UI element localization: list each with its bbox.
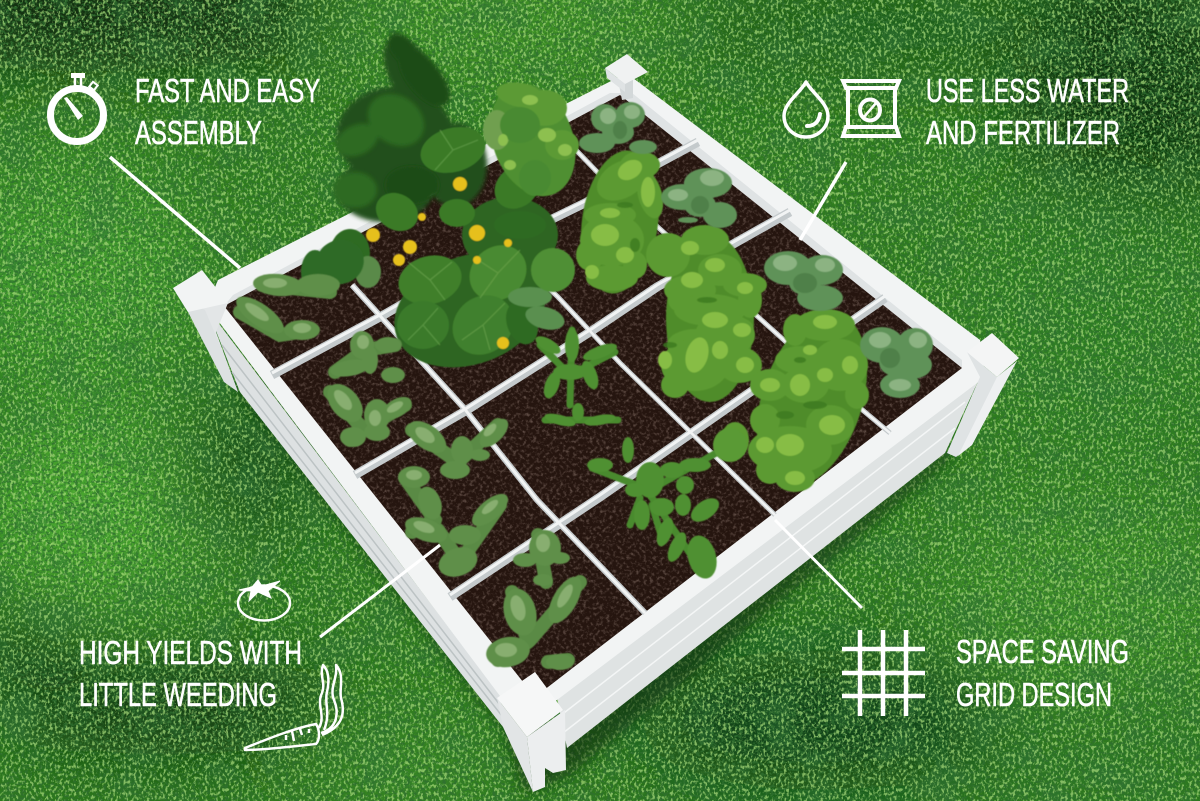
plant: cabbages [579,102,933,398]
post: bottom [497,672,566,792]
upper vine foliage [337,28,487,222]
plant: cucumber vine [330,28,575,387]
callout: high yields with little weeding [79,545,440,750]
icon: stopwatch [50,73,104,142]
icon: tomato [238,580,290,620]
plant: basil clusters [572,145,887,501]
wall: front right [557,377,980,748]
heading: high yields with little weeding [79,634,302,713]
heading: high yields with little weeding: LITTLE WEEDING [79,676,277,713]
icon: grid [842,630,925,716]
callout: use less water and fertilizer [784,72,1129,240]
raised garden bed [173,54,1019,795]
callout: space saving grid design [775,520,1129,716]
heading: space saving grid design: GRID DESIGN [956,676,1112,713]
grid dividers [272,140,890,613]
icon: carrot [245,665,343,750]
bed shadow [240,370,955,795]
heading: use less water and fertilizer: AND FERTILIZER [926,114,1120,151]
plant: kale [231,233,588,671]
icon: water drop [784,82,828,137]
icon: fertilizer bag [843,81,899,136]
heading: space saving grid design [956,633,1129,713]
callout: fast and easy assembly [50,72,320,268]
post: right [947,333,1019,457]
top rim [207,78,985,712]
heading: high yields with little weeding: HIGH YIELDS WITH [79,634,302,671]
heading: space saving grid design: SPACE SAVING [956,633,1129,670]
leader line: water [800,162,846,240]
lower vine foliage [378,197,562,387]
heading: use less water and fertilizer [926,72,1129,151]
soil [226,95,962,688]
post: left [173,270,238,392]
plant: tomatoes [533,328,747,582]
leader line: assembly [110,157,240,268]
plant: basil beside vine [476,72,590,208]
leader line: grid [775,520,862,608]
heading: fast and easy assembly: ASSEMBLY [135,114,262,151]
heading: fast and easy assembly [135,72,320,151]
post: top [605,54,648,100]
kale leaf stems [240,285,580,662]
leader line: kale [320,545,440,637]
heading: fast and easy assembly: FAST AND EASY [135,72,320,109]
inner face of back rims [224,93,962,368]
wall: front left [207,308,503,727]
tomato stems [540,330,718,568]
